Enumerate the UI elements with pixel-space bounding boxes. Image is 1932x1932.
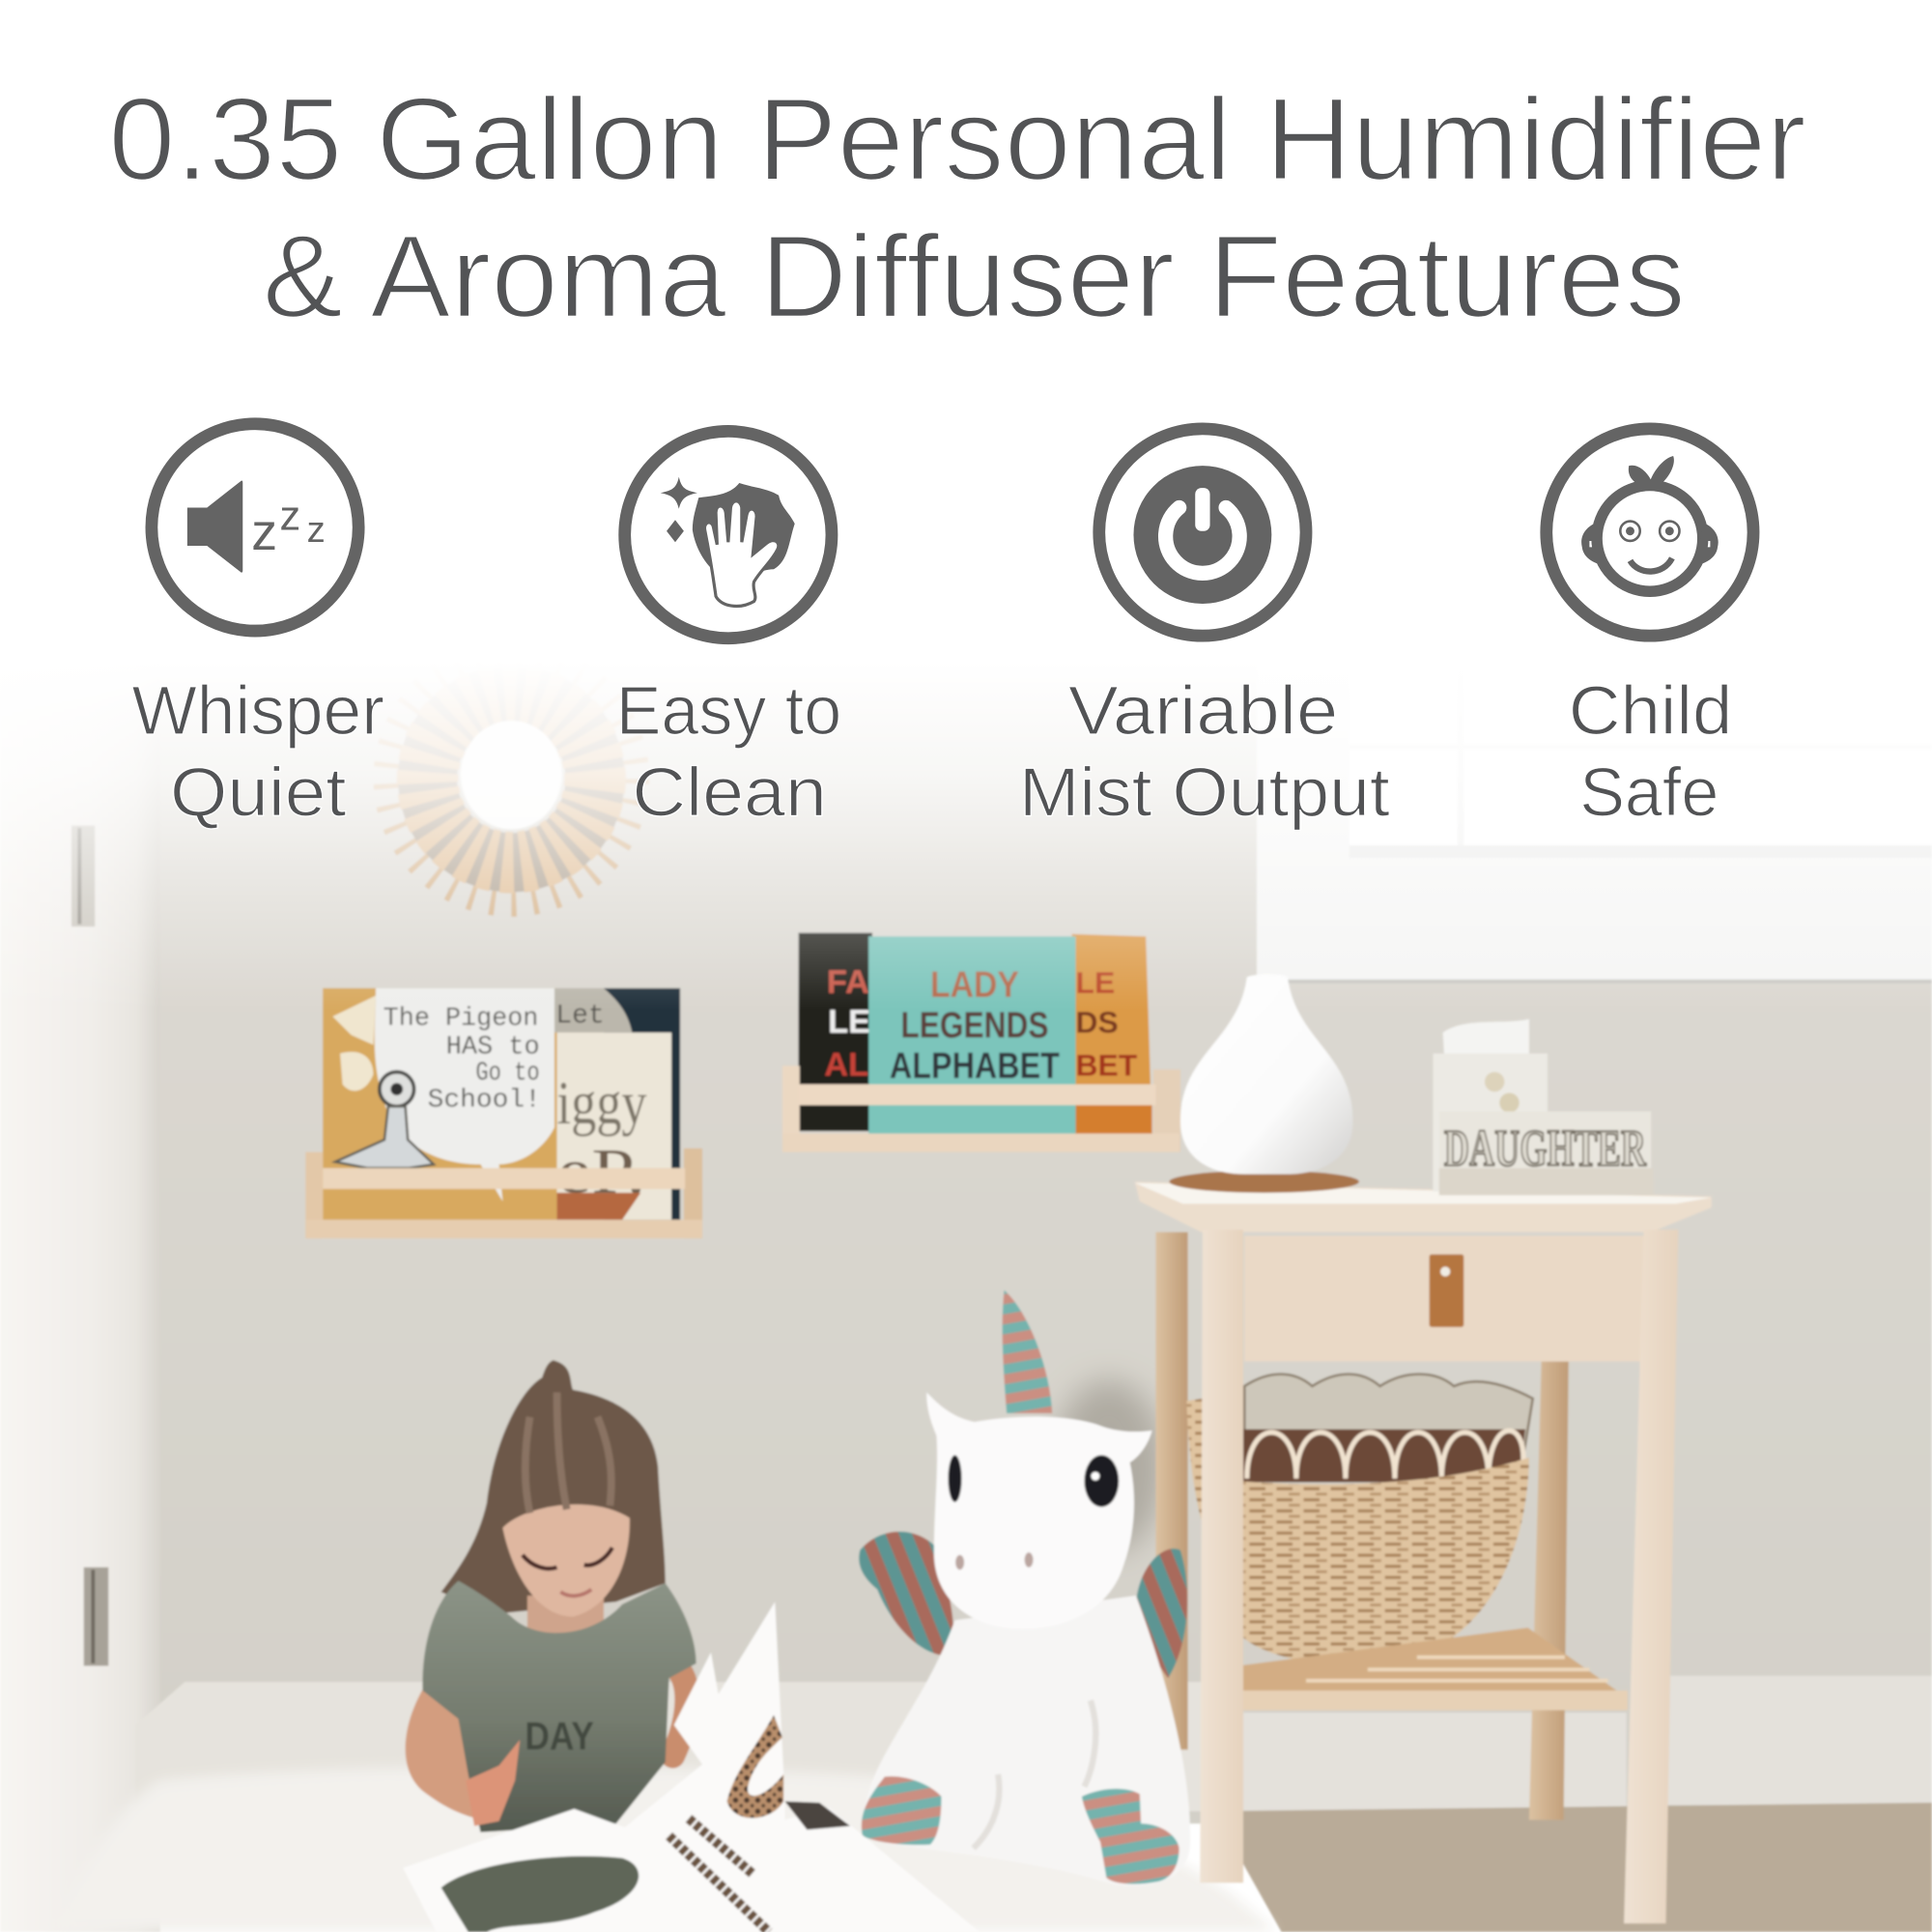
eyes xyxy=(949,1455,1119,1507)
basket front scallops xyxy=(1247,1431,1523,1479)
feature: variable mist output xyxy=(1019,429,1390,831)
feature: whisper quiet xyxy=(131,424,384,831)
speech bubble with pigeon title: The Pigeon xyxy=(384,1005,538,1034)
cream book: eP. xyxy=(557,1137,645,1208)
girl reading xyxy=(406,1360,696,1833)
orange book: BET xyxy=(1076,1048,1138,1083)
leopard loop xyxy=(727,1716,783,1818)
navy book xyxy=(604,988,680,1220)
label: Whisper xyxy=(131,672,384,750)
hand xyxy=(466,1740,520,1826)
teal lady legends book: LEGENDS xyxy=(900,1005,1048,1046)
label xyxy=(616,672,841,831)
speech bubble with pigeon title: Go to xyxy=(475,1059,540,1088)
wooden word sign: DAUGHTER xyxy=(1444,1120,1647,1178)
baseboard right xyxy=(1238,1676,1932,1811)
side table top, drawer, front legs xyxy=(1135,1181,1712,1923)
label xyxy=(131,672,384,831)
fur rug xyxy=(49,1767,1275,1932)
label: Easy to xyxy=(616,672,841,750)
dark page illustration xyxy=(441,1857,639,1932)
basket back scallops xyxy=(1244,1375,1533,1466)
label: Quiet xyxy=(170,753,347,831)
label: Child xyxy=(1569,672,1732,750)
wall xyxy=(0,616,1932,1824)
pigeon character xyxy=(332,996,434,1168)
black book: FA xyxy=(827,964,869,1001)
shelf rail and base xyxy=(782,1065,1180,1152)
basket dark interior xyxy=(1243,1430,1525,1482)
nostrils xyxy=(955,1552,1034,1570)
feet xyxy=(862,1776,1179,1884)
shirt graphic: DAY xyxy=(525,1714,594,1758)
arm right xyxy=(672,1665,687,1756)
icon: muted speaker with zzz: z xyxy=(251,504,277,561)
title: & Aroma Diffuser Features xyxy=(263,211,1686,342)
head xyxy=(926,1392,1152,1629)
tissue box xyxy=(1433,1019,1548,1191)
right book shelf xyxy=(782,933,1180,1152)
white fade overlay at top of photo xyxy=(0,604,1932,1010)
baseboard xyxy=(135,1682,1202,1811)
icon: muted speaker with zzz: z xyxy=(280,493,300,539)
humidifier xyxy=(1180,975,1353,1175)
label: Mist Output xyxy=(1019,753,1390,831)
black book: LE xyxy=(828,1004,870,1040)
label: Safe xyxy=(1579,753,1719,831)
open picture book xyxy=(403,1602,980,1932)
teal lady legends book: ALPHABET xyxy=(890,1045,1060,1087)
label: Variable xyxy=(1068,672,1338,750)
orange book: DS xyxy=(1076,1005,1119,1039)
side table back legs xyxy=(1155,1233,1569,1820)
neck xyxy=(527,1596,604,1651)
teal lady legends book xyxy=(868,936,1076,1133)
cork coaster xyxy=(1169,1171,1359,1193)
orange book xyxy=(1072,934,1152,1133)
hair highlights xyxy=(526,1392,611,1513)
feature: child safe xyxy=(1547,429,1753,831)
hair xyxy=(441,1360,666,1614)
mouth xyxy=(560,1589,591,1596)
speech bubble with pigeon title: School! xyxy=(428,1086,541,1115)
orange book: LE xyxy=(1076,965,1115,1000)
icon: muted speaker with zzz xyxy=(152,424,358,631)
wooden word sign xyxy=(1439,1112,1654,1195)
sunburst mirror xyxy=(388,656,635,902)
title xyxy=(108,73,1806,342)
icon: muted speaker with zzz: z xyxy=(307,509,326,551)
photo: child's room scene xyxy=(0,616,1932,1932)
left book shelf xyxy=(305,988,702,1238)
face xyxy=(502,1504,630,1616)
arm left xyxy=(406,1683,505,1821)
leather drawer pull xyxy=(1430,1254,1463,1327)
grey book with title xyxy=(554,988,632,1033)
black book xyxy=(799,933,872,1131)
basket bowl xyxy=(1238,1458,1529,1665)
leopard stripes xyxy=(669,1819,769,1932)
speech bubble with pigeon title xyxy=(375,988,554,1202)
wing left xyxy=(859,1531,953,1656)
cream book: iggy xyxy=(557,1068,647,1137)
shadow behind unicorn xyxy=(1054,1380,1164,1552)
shelf rail and base xyxy=(305,1149,702,1238)
grey book with title: Let xyxy=(555,1002,605,1032)
wing right xyxy=(1136,1548,1187,1678)
title: 0.35 Gallon Personal Humidifier xyxy=(108,73,1806,205)
window with sill xyxy=(1257,616,1932,983)
leg shading xyxy=(974,1700,1095,1848)
label xyxy=(1569,672,1732,831)
unicorn plush xyxy=(859,1290,1190,1887)
side table lower shelf xyxy=(1238,1628,1628,1710)
feature: easy to clean xyxy=(616,431,841,831)
body xyxy=(864,1596,1190,1887)
icon: baby face xyxy=(1547,429,1753,636)
cream book xyxy=(557,1033,671,1220)
t-shirt xyxy=(422,1580,696,1833)
wicker basket xyxy=(1186,1375,1533,1665)
eyes xyxy=(523,1548,612,1569)
label: Clean xyxy=(632,753,827,831)
icon: hand wiping with sparkles xyxy=(625,431,832,639)
carpet xyxy=(1213,1803,1932,1932)
icon: power button xyxy=(1099,429,1306,636)
door and frame xyxy=(0,616,160,1932)
book shadow page xyxy=(784,1802,850,1830)
yellow pigeon book xyxy=(323,988,557,1220)
black book: AL xyxy=(824,1047,868,1084)
speech bubble with pigeon title: HAS to xyxy=(446,1034,540,1063)
teal lady legends book: LADY xyxy=(930,964,1019,1006)
label xyxy=(1019,672,1390,831)
horn xyxy=(1003,1290,1052,1413)
